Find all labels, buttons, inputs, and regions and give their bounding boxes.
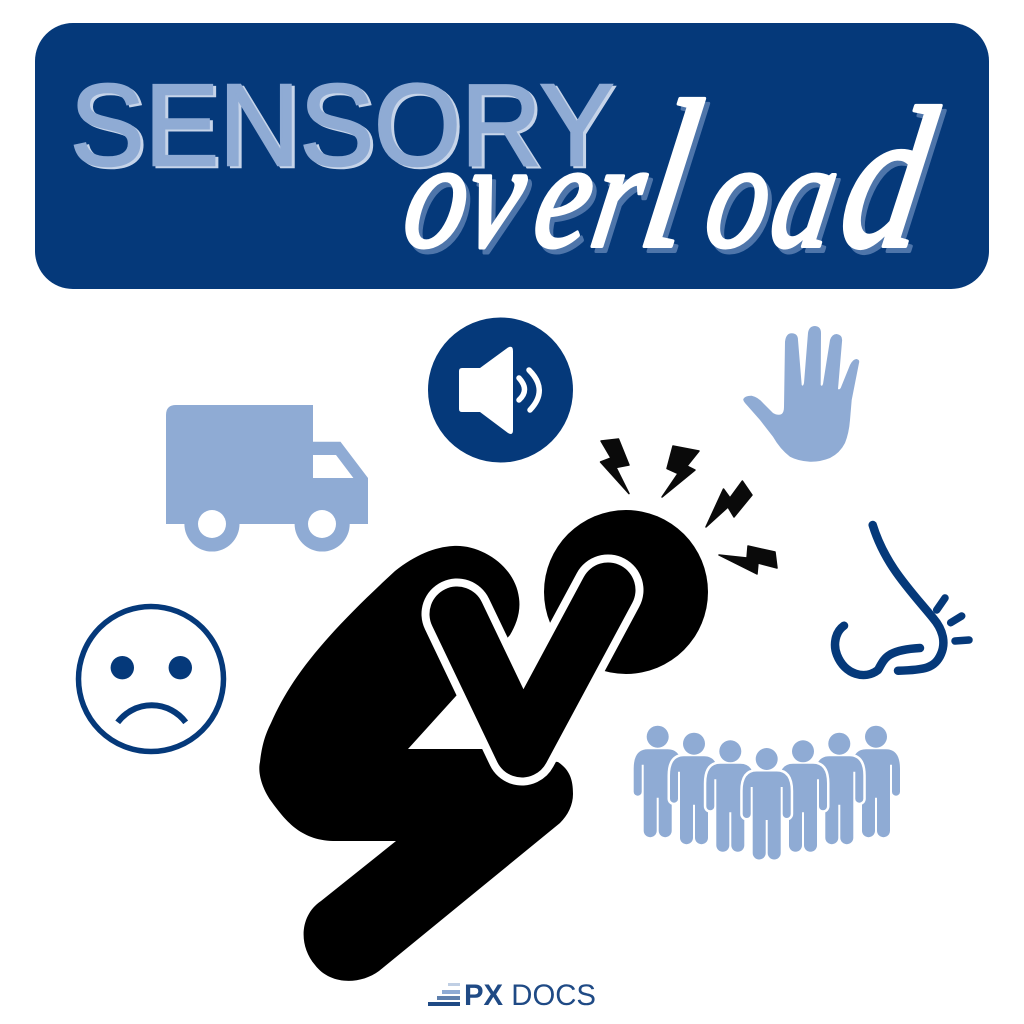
icon: delivery truck: [166, 405, 368, 552]
icon: sad face: [78, 606, 224, 752]
icon: crowd of people: [634, 726, 900, 860]
logo wordmark: PX DOCS: [464, 979, 596, 1012]
body and leg: [259, 546, 573, 981]
heading: SENSORY: SENSORY: [70, 60, 614, 190]
arms: [457, 590, 608, 750]
logo: PX DOCS: [428, 979, 596, 1012]
banner background: [35, 23, 989, 289]
heading: overload: overload: [391, 57, 950, 292]
icon: hand: [743, 326, 859, 462]
icon: nose: [835, 525, 969, 675]
title banner: [35, 23, 989, 292]
figure: person bent over holding head: [259, 510, 708, 981]
icon: speaker: [428, 318, 573, 462]
head: [544, 510, 708, 674]
icon: lightning bolts: [600, 439, 777, 574]
logo stair mark: [428, 983, 460, 1006]
